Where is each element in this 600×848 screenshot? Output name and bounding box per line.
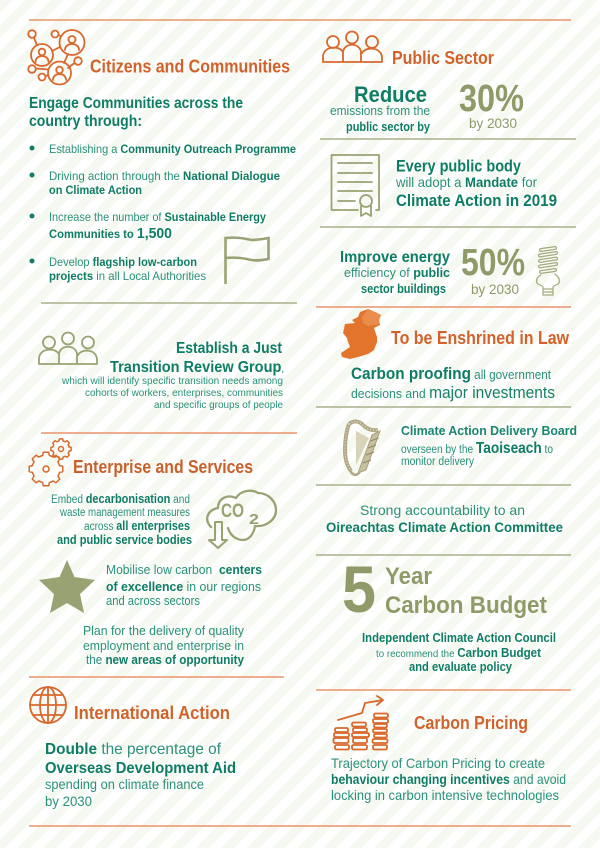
panel: citizens and communities [28,30,296,284]
text: independent climate action council: to recommend the Carbon Budget [376,646,542,660]
bullet list: Develop flagship low-carbon [49,255,197,269]
text: establish a just transition review group: which will identify specific transition needs among [61,375,283,387]
bullet list: Increase the number of Sustainable Energy [49,210,266,224]
text: centers of excellence: Mobilise low carbon centers [106,562,262,577]
icon: people group [39,332,97,364]
heading: 5 year carbon budget: Year [385,563,432,590]
bullet list: on Climate Action [49,183,142,197]
text: mandate for climate action: Every public body [396,158,522,176]
text: establish a just transition review group: Transition Review Group, [110,359,284,376]
text: double overseas development aid: Overseas Development Aid [45,760,236,777]
text: double overseas development aid: Double the percentage of [45,741,222,758]
panel: carbon pricing [331,696,566,803]
text: climate action delivery board: overseen by the Taoiseach to [401,440,553,457]
stat: 30 percent by 2030: by 2030 [469,116,517,131]
text: improve energy efficiency: sector buildings [361,281,446,296]
text: reduce emissions: Reduce [354,82,427,107]
heading: 5 year carbon budget [342,552,547,626]
text: centers of excellence: of excellence in our regions [106,579,261,594]
text: centers of excellence [106,562,262,608]
text: double overseas development aid [45,741,236,809]
stat: 30 percent by 2030 [459,78,524,131]
icon: co2 cloud: CO [221,501,244,522]
icon: co2 cloud: 2 [249,511,259,528]
text: improve energy efficiency: efficiency of public [344,265,450,280]
text: mandate for climate action [395,158,557,210]
icon: harp [345,421,380,475]
text: plan for delivery: Plan for the delivery of quality [83,624,245,638]
text: trajectory of carbon pricing: Trajectory of Carbon Pricing to create [331,755,545,771]
text: climate action delivery board [401,423,577,468]
text: independent climate action council: and evaluate policy [409,660,512,674]
icon: community network [28,30,84,84]
heading: 5 year carbon budget: 5 [342,552,376,626]
text: embed decarbonisation: and public service bodies [57,533,192,547]
text: embed decarbonisation [51,492,192,547]
intro text: engage communities: country through: [29,113,142,130]
icon: gears [29,439,71,486]
text: plan for delivery: employment and enterprise in [83,639,244,653]
text: carbon proofing: decisions and major investments [351,384,555,402]
text: reduce emissions [330,82,430,134]
text: double overseas development aid: spending on climate finance [45,777,204,792]
text: establish a just transition review group [61,340,284,411]
text: establish a just transition review group: cohorts of workers, enterprises, communities [85,387,283,399]
heading: international action: International Action [74,703,230,723]
bullet list: Establishing a Community Outreach Programme [49,142,296,156]
text: embed decarbonisation: across all enterprises [84,519,190,533]
bullet list: projects in all Local Authorities [49,269,206,283]
stat: 50 percent by 2030: by 2030 [471,282,519,297]
text: improve energy efficiency [340,249,450,296]
text: strong accountability: Oireachtas Climate Action Committee [326,519,563,535]
heading: enterprise and services: Enterprise and Services [73,457,253,477]
heading: public sector: Public Sector [392,48,494,68]
text: double overseas development aid: by 2030 [45,794,92,809]
panel: just transition [39,332,284,411]
stat: 50 percent by 2030: 50% [461,242,525,284]
heading: to be enshrined in law: To be Enshrined in Law [391,328,570,348]
icon: map of ireland [341,309,381,359]
icon: rising coin stacks [334,696,388,750]
text: strong accountability [326,502,563,535]
text: embed decarbonisation: Embed decarbonisation and [51,492,190,506]
text: climate action delivery board: monitor delivery [401,456,474,468]
text: carbon proofing: Carbon proofing all government [351,364,551,383]
heading: carbon pricing: Carbon Pricing [414,713,528,733]
text: reduce emissions: public sector by [346,120,430,134]
text: mandate for climate action: Climate Action in 2019 [396,192,557,210]
stat: 30 percent by 2030: 30% [459,78,524,120]
text: plan for delivery: the new areas of opportunity [86,653,244,667]
bullet list: Driving action through the National Dialogue [49,169,280,183]
panel: enterprise and services [29,439,276,667]
text: trajectory of carbon pricing: behaviour changing incentives and avoid [331,771,566,787]
text: centers of excellence: and across sectors [106,593,200,608]
text: plan for delivery [83,624,245,667]
text: trajectory of carbon pricing: locking in carbon intensive technologies [331,787,559,803]
panel: international action [30,687,236,809]
bullet list: Communities to 1,500 [49,225,172,242]
heading: citizens and communities: Citizens and Communities [90,56,290,76]
text: carbon proofing [351,364,555,402]
stat: 50 percent by 2030 [461,242,525,297]
text: strong accountability: Strong accountability to an [360,502,525,518]
icon: people group orange [323,32,382,62]
text: establish a just transition review group: Establish a Just [176,340,283,357]
panel: five year carbon budget [342,552,556,674]
text: trajectory of carbon pricing [331,755,566,803]
icon: star [39,560,95,613]
intro text: engage communities [29,95,243,130]
heading: 5 year carbon budget: Carbon Budget [385,592,547,619]
text: improve energy efficiency: Improve energy [340,249,450,266]
icon: light bulb [537,248,559,295]
text: embed decarbonisation: waste management measures [59,507,190,519]
text: reduce emissions: emissions from the [330,104,430,118]
icon: globe [30,687,66,723]
text: independent climate action council [362,631,556,674]
intro text: engage communities: Engage Communities across the [29,95,243,112]
icon: flag [226,238,268,284]
panel: public sector [323,32,559,297]
text: independent climate action council: Independent Climate Action Council [362,631,556,645]
text: mandate for climate action: will adopt a Mandate for [395,174,537,190]
icon: co2 cloud [207,491,276,548]
panel: to be enshrined in law [326,309,577,535]
icon: certificate [332,155,379,216]
bullet list [30,142,296,283]
text: establish a just transition review group: and specific groups of people [154,399,283,411]
text: climate action delivery board: Climate Action Delivery Board [401,423,577,438]
